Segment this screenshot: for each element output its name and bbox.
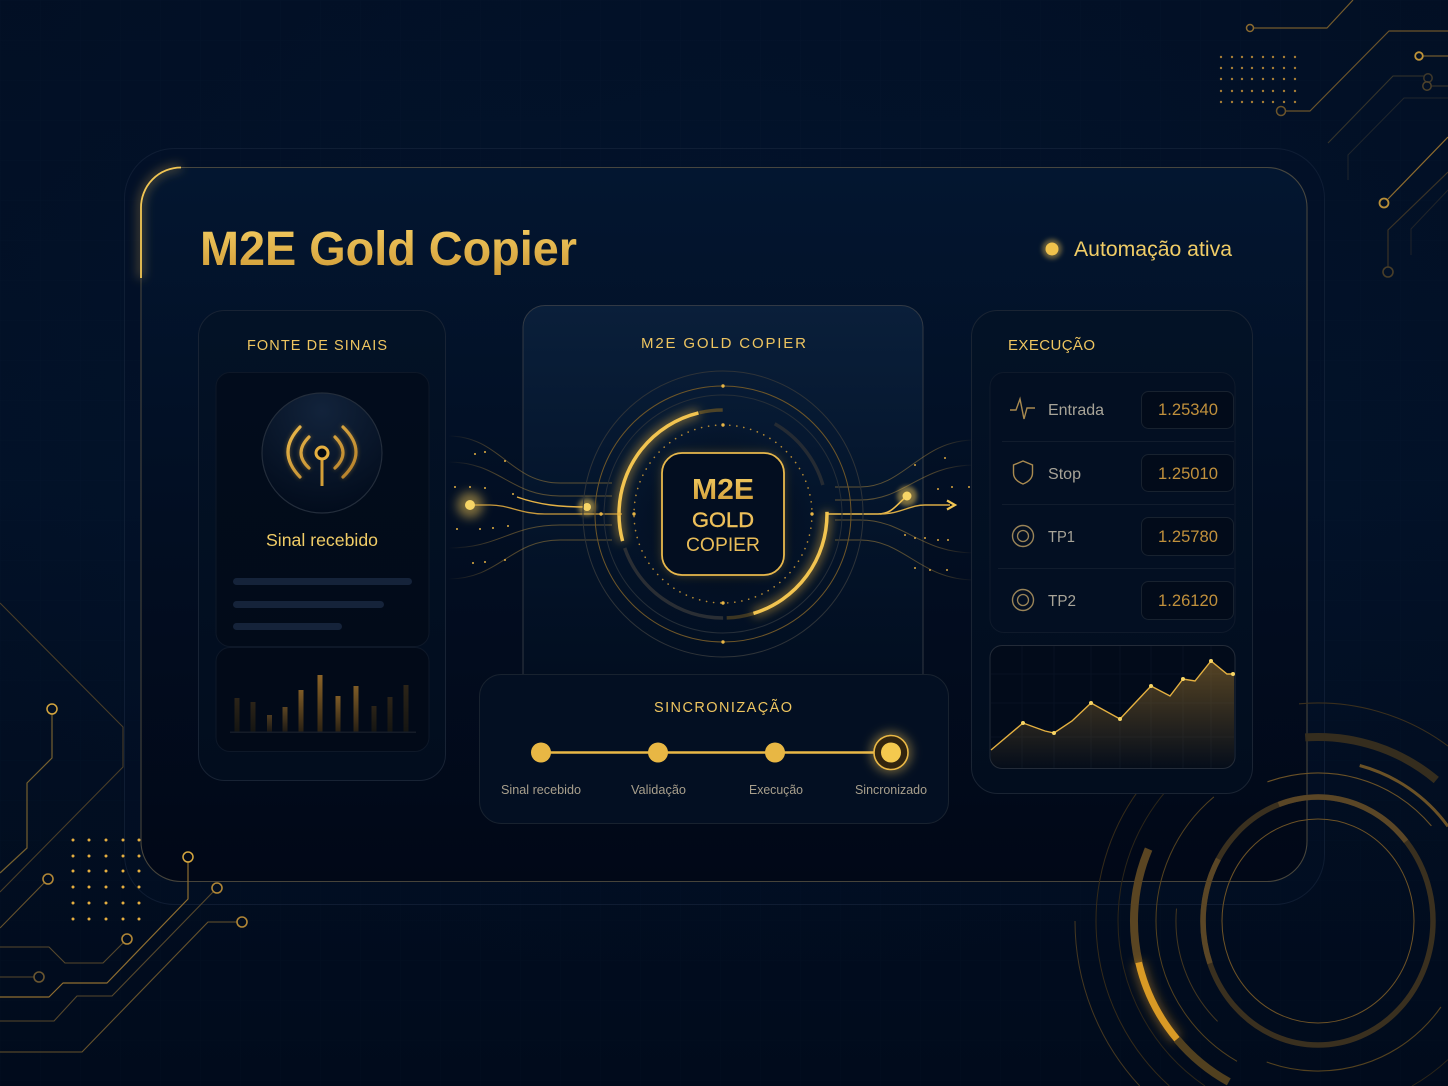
row: stop [1014, 454, 1234, 492]
row: entry: 1.25340 [1158, 401, 1218, 419]
label: signal received: Sinal recebido [266, 530, 378, 550]
panel: central copier [523, 306, 923, 680]
title: M2E Gold Copier [200, 223, 577, 276]
flow lines: input [448, 436, 622, 579]
signal card [216, 372, 429, 646]
status: automation active: Automação ativa [1074, 238, 1232, 261]
heading: signal source: FONTE DE SINAIS [247, 338, 387, 354]
execution rows [990, 372, 1235, 632]
chip: M2E Gold Copier [662, 453, 784, 575]
row: TP2 [1012, 582, 1234, 620]
placeholder text lines [233, 578, 412, 630]
central ring gauge [583, 371, 863, 657]
outer frame [124, 148, 1324, 904]
chip text [686, 474, 760, 556]
timeline labels: Sinal recebido [501, 783, 581, 797]
row: TP1: TP1 [1048, 529, 1075, 546]
dotted ring [634, 425, 812, 603]
main dashboard panel [141, 168, 1307, 882]
heading: synchronisation: SINCRONIZAÇÃO [654, 699, 792, 716]
dot grid: top right [1221, 57, 1295, 102]
row: stop: 1.25010 [1158, 465, 1218, 483]
bar chart: signal activity [216, 648, 429, 752]
timeline labels [501, 783, 927, 797]
decorative concentric rings: bottom right [1075, 703, 1448, 1086]
timeline labels: Execução [749, 783, 803, 797]
gold progress arcs [619, 410, 827, 618]
chip text: COPIER [686, 535, 760, 556]
row: TP2: 1.26120 [1158, 592, 1218, 610]
row: stop: Stop [1048, 466, 1081, 483]
panel: execution [972, 310, 1252, 794]
panel: synchronisation [480, 674, 948, 824]
circuit decoration: bottom left [0, 603, 247, 1052]
row: TP1: 1.25780 [1158, 528, 1218, 546]
panel: signal source [198, 310, 446, 780]
icon: antenna in circle [262, 393, 382, 513]
row: entry: Entrada [1048, 402, 1104, 419]
timeline labels: Sincronizado [855, 783, 927, 797]
chip text: GOLD [692, 509, 754, 532]
dot grid: bottom left [73, 840, 139, 919]
arrow: output [947, 500, 955, 510]
row: entry [1010, 392, 1234, 428]
dim arcs [619, 410, 827, 618]
circuit decoration: top right [1221, 0, 1448, 277]
row: TP1 [1012, 518, 1234, 556]
flow lines: output [826, 440, 975, 580]
chip text: M2E [692, 474, 754, 506]
timeline [531, 732, 912, 774]
row: TP2: TP2 [1048, 593, 1076, 610]
panel corner highlight [141, 168, 181, 278]
line chart: price [990, 646, 1235, 768]
heading: copier: M2E GOLD COPIER [641, 335, 806, 352]
timeline labels: Validação [631, 783, 686, 797]
heading: execution: EXECUÇÃO [1008, 337, 1095, 354]
